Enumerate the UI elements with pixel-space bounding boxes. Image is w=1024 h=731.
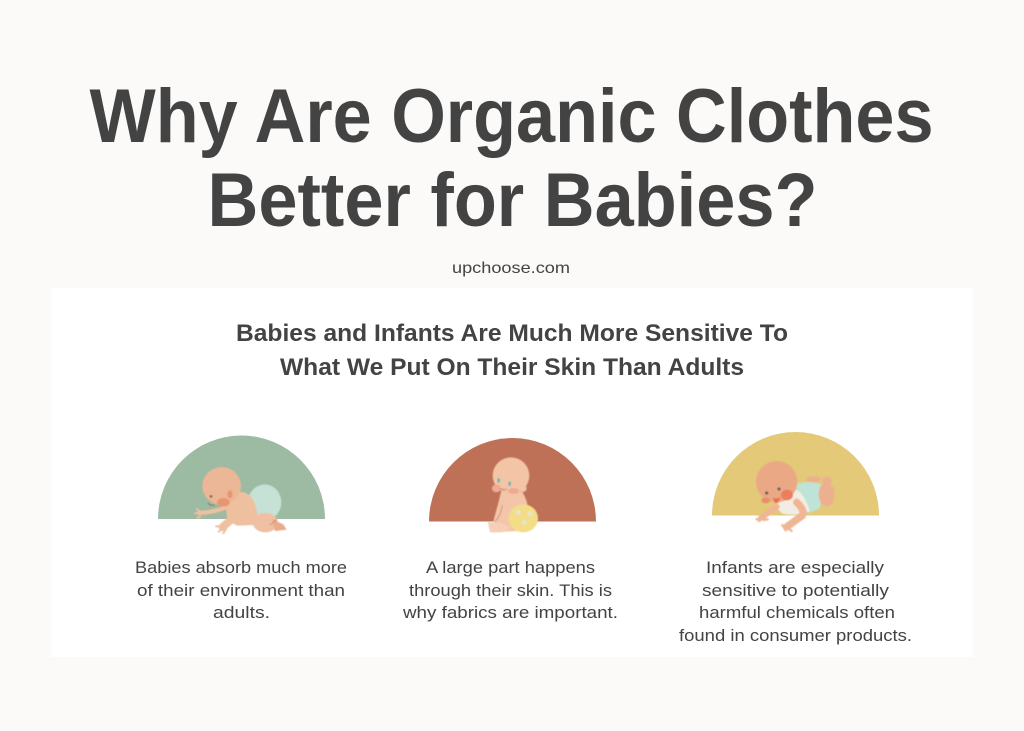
- icon: terracotta semicircle with sitting baby: [429, 438, 596, 532]
- title: [90, 74, 934, 243]
- icon: green semicircle with crawling baby: [158, 436, 325, 533]
- column: sensitive to chemicals: [679, 432, 912, 645]
- title: Why Are Organic Clothes: [90, 74, 934, 159]
- caption: A large part happens: [426, 558, 595, 577]
- caption: why fabrics are important.: [402, 603, 618, 622]
- caption: sensitive to potentially: [702, 581, 890, 600]
- icon: yellow semicircle with baby on tummy: [712, 432, 879, 531]
- caption: Infants are especially: [706, 558, 885, 577]
- caption: [679, 558, 912, 645]
- caption: [135, 558, 347, 622]
- caption: found in consumer products.: [679, 626, 912, 645]
- panel heading: [236, 320, 788, 381]
- column: skin absorption: [402, 438, 618, 622]
- source label: upchoose.com: [452, 260, 570, 277]
- caption: [402, 558, 618, 622]
- caption: of their environment than: [137, 581, 345, 600]
- panel: white content card: [51, 288, 973, 657]
- panel heading: Babies and Infants Are Much More Sensitive To: [236, 320, 788, 347]
- caption: Babies absorb much more: [135, 558, 347, 577]
- column: babies absorb: [135, 436, 347, 622]
- caption: harmful chemicals often: [699, 603, 895, 622]
- panel heading: What We Put On Their Skin Than Adults: [280, 354, 744, 381]
- title: Better for Babies?: [208, 158, 818, 243]
- caption: adults.: [213, 603, 270, 622]
- caption: through their skin. This is: [409, 581, 612, 600]
